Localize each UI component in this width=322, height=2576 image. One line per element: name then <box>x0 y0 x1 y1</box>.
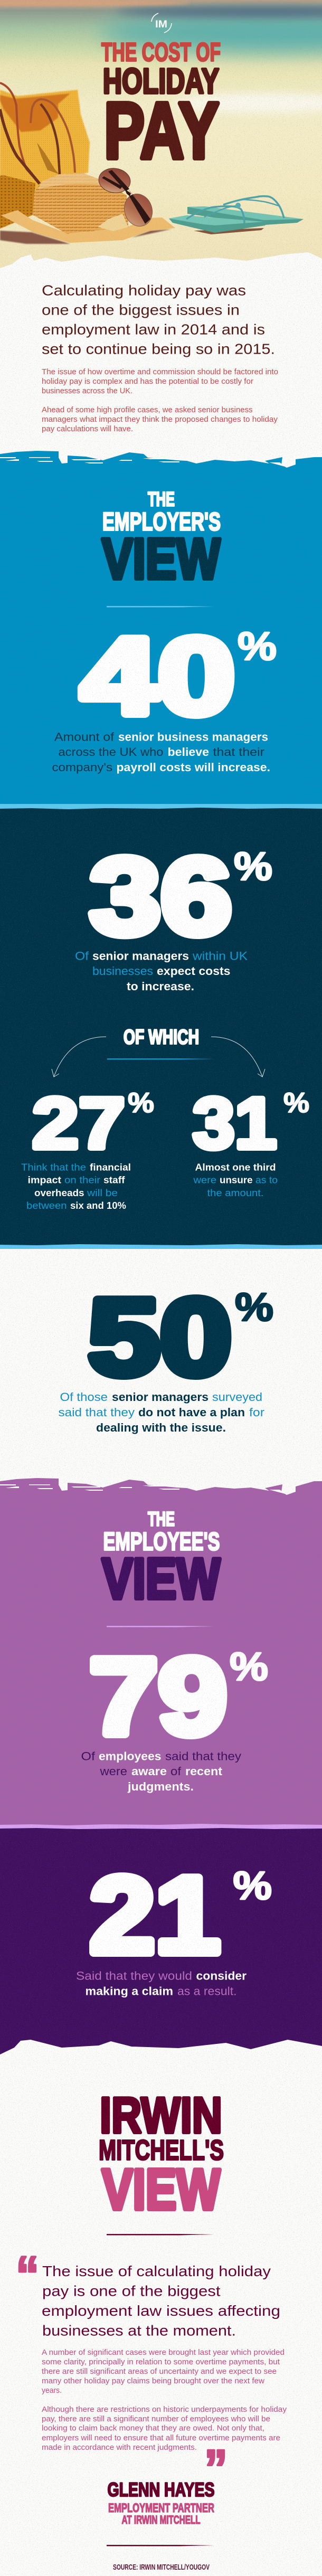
stat caption: 31%: the amount. <box>207 1188 264 1198</box>
stat caption: 21% <box>76 1969 247 1997</box>
stat caption: 40%: across the UK who <box>58 745 164 759</box>
quote body text: looking to claim back money that they are owed. Not only that, <box>42 2424 264 2432</box>
intro detail text: The issue of how overtime and commission should be factored into <box>42 367 278 376</box>
icon: IM logo: IM <box>155 19 167 30</box>
stat: 21% <box>90 1854 272 1976</box>
title: PAY <box>104 86 219 175</box>
stat: 40% <box>81 615 277 737</box>
attribution: Glenn Hayes: AT IRWIN MITCHELL <box>121 2513 201 2526</box>
stat: 31% <box>193 1083 309 1164</box>
icon: closing quote mark: ” <box>204 2439 228 2498</box>
panel: hero beach photo <box>0 0 322 269</box>
stat caption: 79%: were <box>99 1765 127 1778</box>
intro detail text: holiday pay is complex and has the potential to be costly for <box>42 377 253 386</box>
intro text block <box>42 282 275 357</box>
heading: the employee's view <box>102 1509 220 1611</box>
stat caption: 36%: within UK <box>192 949 248 963</box>
stat caption: 36% <box>75 949 248 993</box>
stat caption: 36%: Of <box>75 949 89 963</box>
stat caption: 31%: as to <box>255 1175 278 1186</box>
stat: 31%: 31 <box>193 1083 277 1164</box>
stat caption: 36%: senior managers <box>92 949 189 963</box>
panel: employee's view <box>0 1478 322 1829</box>
title <box>101 38 221 175</box>
quote body text: made in accordance with recent judgments. <box>42 2443 197 2452</box>
panel: 21% dark purple section <box>0 1824 322 2056</box>
heading: the employee's view: EMPLOYEE'S <box>103 1528 220 1556</box>
attribution: Glenn Hayes: EMPLOYMENT PARTNER <box>108 2501 214 2515</box>
stat caption: 40%: senior business managers <box>118 731 268 743</box>
icon: sunglasses <box>97 166 156 230</box>
stat caption: 50%: senior managers <box>112 1390 209 1404</box>
stat: 79%: 79 <box>89 1636 227 1757</box>
stat caption: 40%: that their <box>213 745 264 759</box>
stat caption: 50%: surveyed <box>212 1390 262 1404</box>
title: HOLIDAY <box>103 61 219 101</box>
attribution: Glenn Hayes: GLENN HAYES <box>108 2479 214 2501</box>
heading: Irwin Mitchell's view <box>99 2087 224 2222</box>
heading: the employee's view: THE <box>148 1509 175 1531</box>
intro text block: Calculating holiday pay was <box>42 282 246 299</box>
icon: straw bag <box>0 83 90 229</box>
icon: IM logo <box>151 13 172 33</box>
stat caption: 79%: aware <box>131 1765 167 1778</box>
quote body text: pay, there are still a significant number of employees who will be <box>42 2414 270 2423</box>
stat: 21%: % <box>233 1863 272 1908</box>
stat caption: 27%: between <box>26 1200 67 1211</box>
stat caption: 27%: six and 10% <box>70 1200 126 1211</box>
attribution: Glenn Hayes <box>108 2479 214 2526</box>
stat: 50%: 50 <box>88 1276 232 1398</box>
stat: 21%: 21 <box>90 1854 220 1976</box>
stat caption: 40%: company's <box>52 761 112 774</box>
stat caption: 27%: financial <box>90 1162 131 1173</box>
quote body text: years. <box>42 2386 62 2395</box>
stat caption: 21%: consider <box>196 1969 247 1983</box>
heading: the employer's view: THE <box>148 489 175 511</box>
panel: employer's view <box>0 451 322 809</box>
quote body text: many other holiday pay claims being brought over the next few <box>42 2376 264 2385</box>
stat caption: 21%: as a result. <box>177 1985 236 1997</box>
stat caption: 79%: said that they <box>165 1749 241 1763</box>
intro text block: set to continue being so in 2015. <box>42 341 275 357</box>
quote headline: businesses at the moment. <box>42 2323 236 2338</box>
arrow: left <box>52 1037 106 1077</box>
stat caption: 36%: to increase. <box>127 980 194 993</box>
heading: Irwin Mitchell's view: MITCHELL'S <box>99 2135 224 2166</box>
stat: 40%: 40 <box>81 615 235 737</box>
stat: 27% <box>32 1083 154 1164</box>
stat: 79% <box>89 1636 268 1757</box>
heading: Irwin Mitchell's view: VIEW <box>102 2157 220 2222</box>
quote body text <box>42 2348 287 2452</box>
stat: 31%: % <box>283 1087 309 1119</box>
title: THE COST OF <box>101 38 221 67</box>
heading: the employer's view: EMPLOYER'S <box>102 508 221 536</box>
stat caption: 50% <box>58 1390 264 1434</box>
torn paper edge under hero <box>0 252 322 274</box>
arrow: right <box>211 1037 265 1077</box>
stat caption: 79%: recent <box>185 1765 223 1778</box>
intro text block: employment law in 2014 and is <box>42 321 265 338</box>
icon: straw hat <box>1 173 175 243</box>
stat caption: 79%: Of <box>81 1749 96 1763</box>
heading: Irwin Mitchell's view: IRWIN <box>100 2087 222 2144</box>
stat caption: 21%: Said that they would <box>76 1969 192 1983</box>
quote body text: some clarity, principally in relation to some overtime payments, but <box>42 2357 280 2366</box>
intro detail text: pay calculations will have. <box>42 424 133 433</box>
panel: 50% white section <box>58 1276 273 1434</box>
stat caption: 27%: on their <box>64 1175 100 1186</box>
stat caption: 40%: payroll costs will increase. <box>116 761 270 774</box>
heading: the employee's view: VIEW <box>102 1547 220 1611</box>
heading: the employer's view <box>102 489 221 591</box>
intro text block: one of the biggest issues in <box>42 302 240 318</box>
stat caption: 79%: judgments. <box>127 1780 194 1793</box>
stat caption: 50%: said that they <box>58 1406 135 1419</box>
shadow under hat <box>0 229 172 244</box>
stat caption: 40%: believe <box>168 745 209 759</box>
stat caption: 31% <box>193 1162 278 1198</box>
stat caption: 27% <box>21 1162 131 1211</box>
panel: Irwin Mitchell's view <box>0 2040 322 2576</box>
stat caption: 79%: employees <box>99 1749 162 1763</box>
intro detail text: managers what impact they think the proposed changes to holiday <box>42 415 278 424</box>
quote body text: there are still significant areas of uncertainty and we expect to see <box>42 2367 277 2376</box>
quote headline: employment law issues affecting <box>42 2303 280 2319</box>
intro detail text: businesses across the UK. <box>42 386 132 395</box>
stat: 27%: % <box>128 1087 154 1119</box>
stat caption: 21%: making a claim <box>86 1985 173 1997</box>
stat caption: 36%: businesses <box>92 964 153 978</box>
stat caption: 27%: overheads <box>34 1188 84 1198</box>
stat caption: 31%: unsure <box>220 1175 252 1186</box>
stat caption: 40%: Amount of <box>54 731 115 743</box>
icon: flip flops <box>169 196 304 234</box>
stat caption: 27%: impact <box>27 1175 61 1186</box>
stat caption: 27%: staff <box>103 1175 126 1186</box>
quote headline <box>42 2263 280 2338</box>
stat caption: 31%: Almost one third <box>195 1162 276 1173</box>
stat caption: 50%: Of those <box>60 1390 108 1404</box>
stat: 50%: % <box>235 1285 273 1329</box>
stat: 50% <box>88 1276 273 1398</box>
stat caption: 79% <box>81 1749 241 1793</box>
stat caption: 36%: expect costs <box>157 964 230 978</box>
quote body text: employers will need to ensure that all future overtime payments are <box>42 2433 280 2442</box>
stat caption: 27%: will be <box>87 1188 118 1198</box>
stat caption: 31%: were <box>193 1175 216 1186</box>
stat: 36%: % <box>234 844 272 888</box>
intro detail text: Ahead of some high profile cases, we asked senior business <box>42 405 252 414</box>
heading: the employer's view: VIEW <box>102 527 220 591</box>
stat caption: 50%: do not have a plan <box>138 1406 245 1419</box>
quote body text: Although there are restrictions on historic underpayments for holiday <box>42 2405 287 2414</box>
stat: 36%: 36 <box>90 836 232 957</box>
quote headline: The issue of calculating holiday <box>42 2263 271 2279</box>
stat: 36% <box>90 836 272 957</box>
stat caption: 27%: Think that the <box>21 1162 86 1173</box>
stat caption: 40% <box>52 731 270 774</box>
source line: SOURCE: IRWIN MITCHELL/YOUGOV <box>113 2563 210 2572</box>
stat caption: 50%: for <box>249 1406 264 1419</box>
quote body text: A number of significant cases were brought last year which provided <box>42 2348 285 2357</box>
stat: 79%: % <box>230 1644 268 1689</box>
stat caption: 79%: of <box>171 1765 182 1778</box>
intro detail text <box>42 367 278 433</box>
stat caption: 50%: dealing with the issue. <box>96 1421 226 1434</box>
panel: 36% dark section <box>0 804 322 1249</box>
heading: of which: OF WHICH <box>124 1026 199 1048</box>
stat: 27%: 27 <box>32 1083 125 1164</box>
icon: opening quote mark: “ <box>16 2246 39 2305</box>
quote headline: pay is one of the biggest <box>42 2283 221 2299</box>
stat: 40%: % <box>238 624 277 668</box>
